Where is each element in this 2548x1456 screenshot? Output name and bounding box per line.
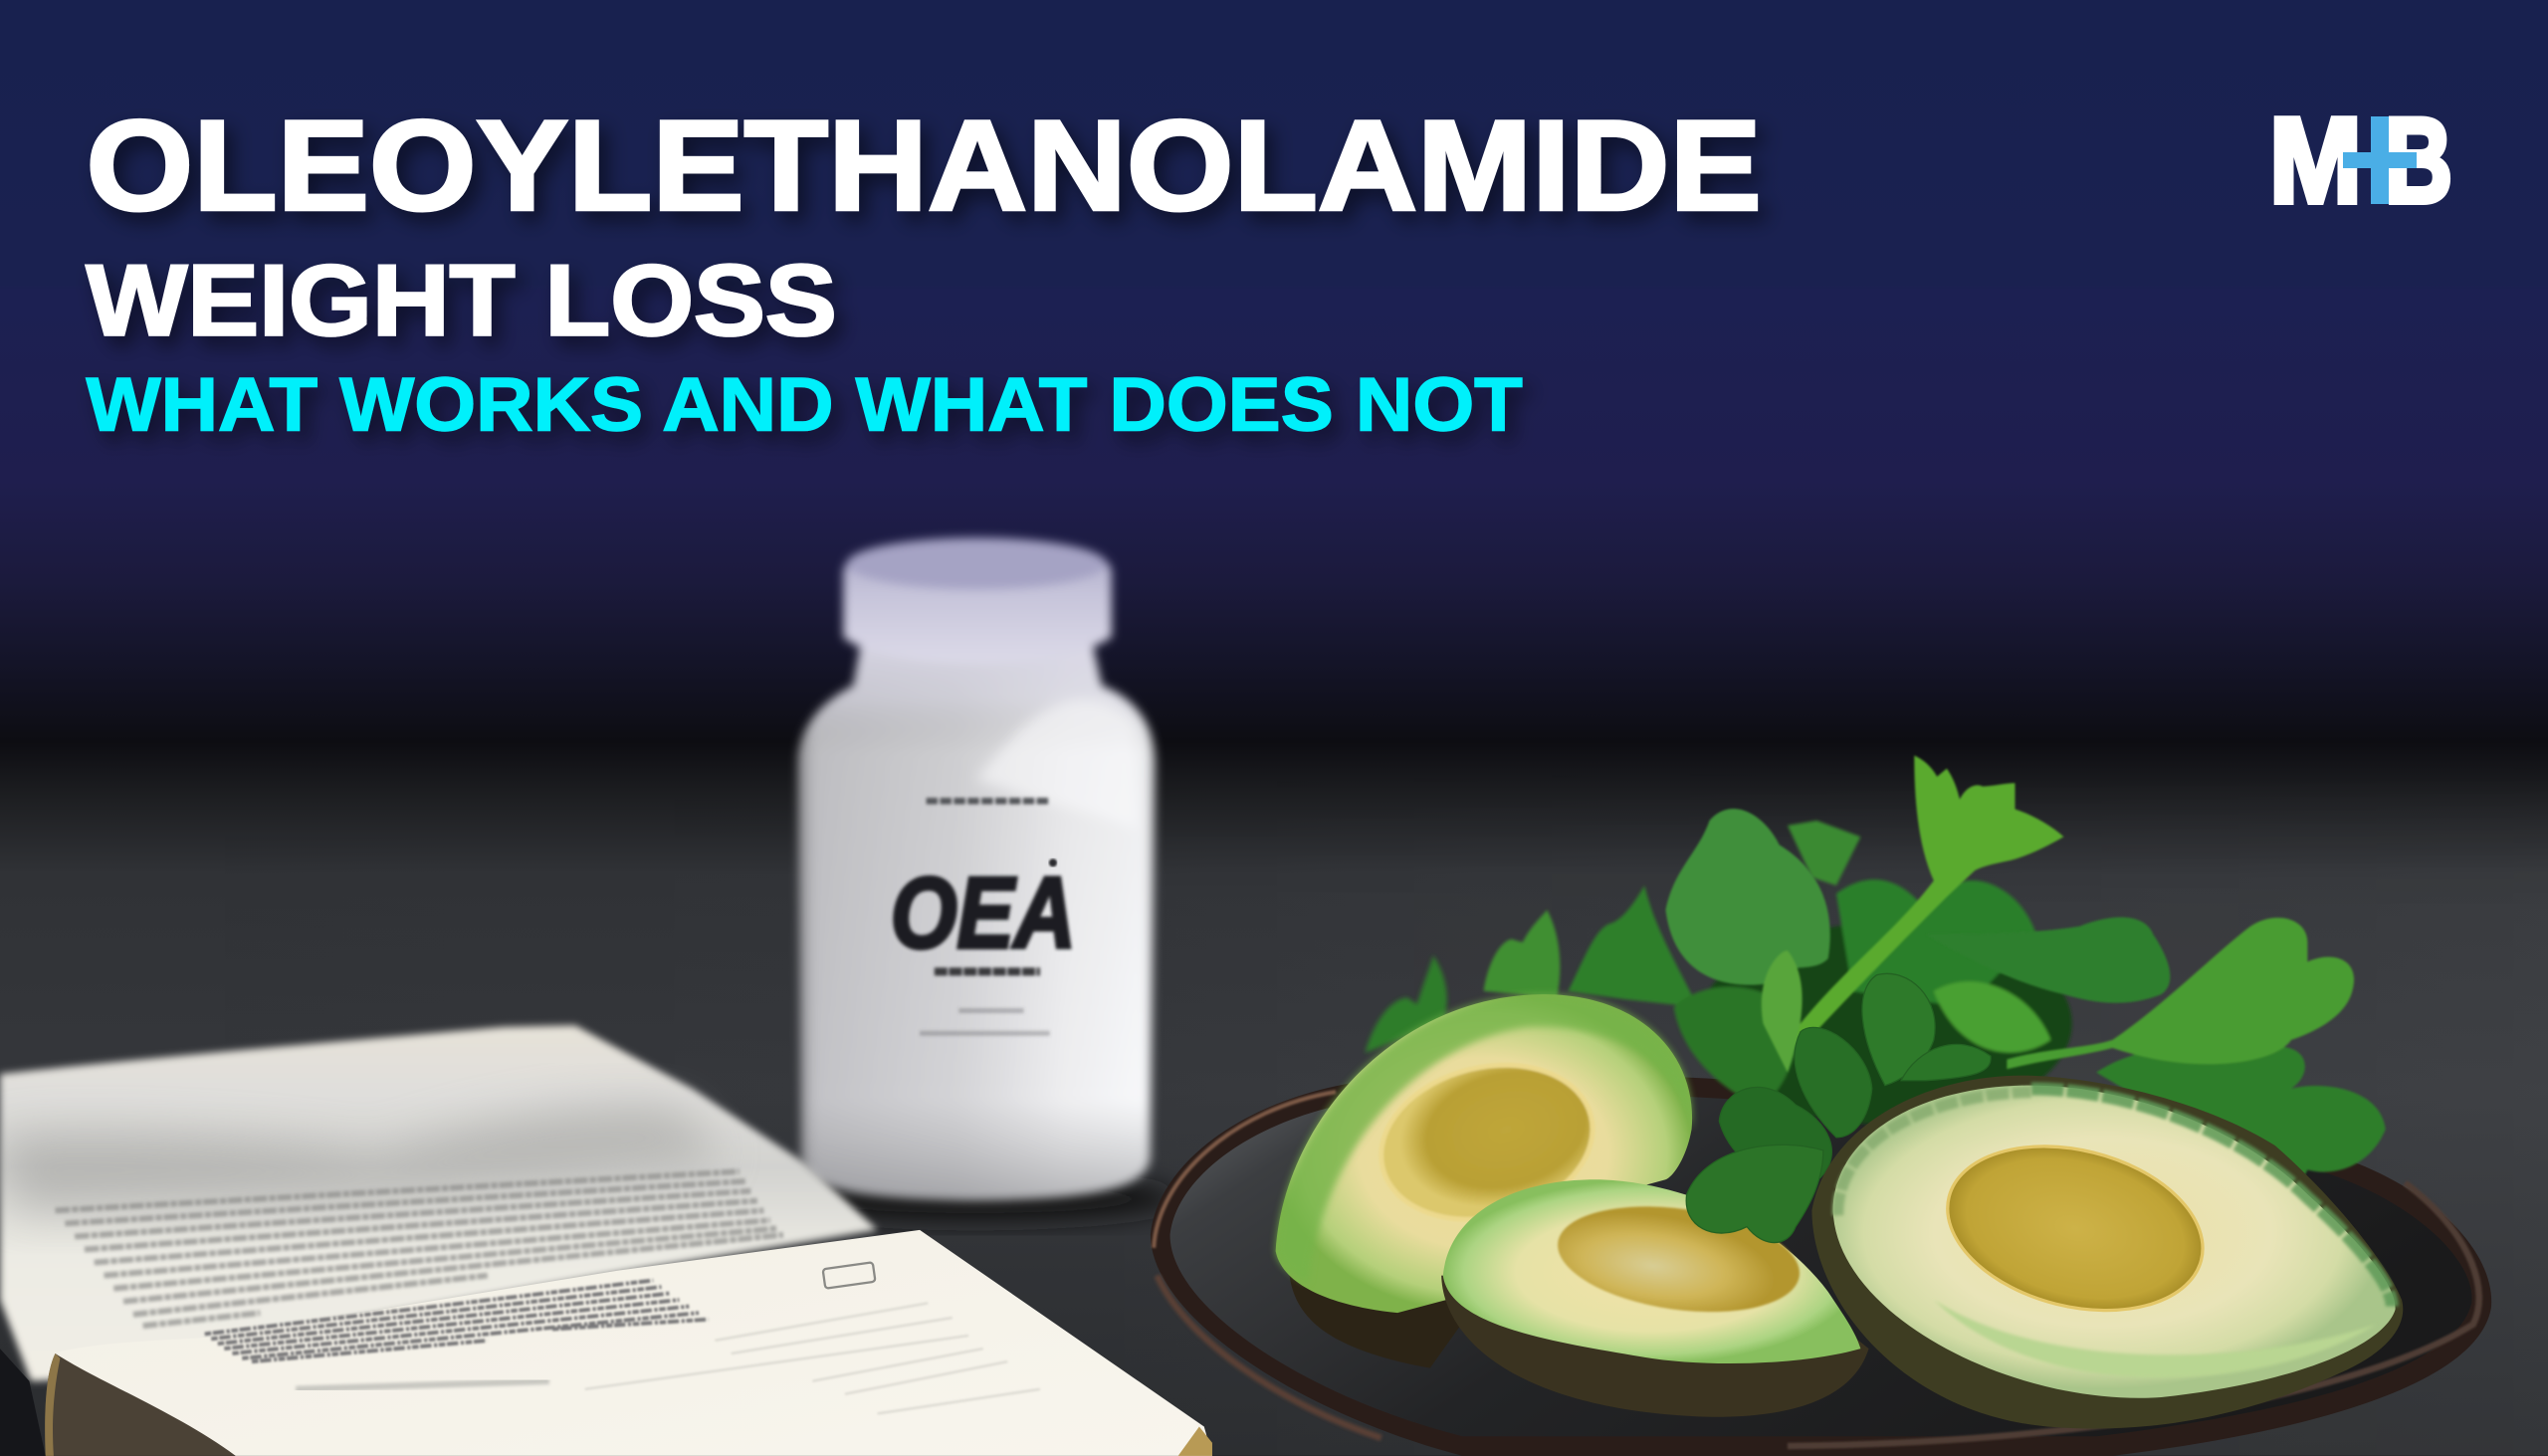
pit small	[1551, 1192, 1806, 1326]
lower right leaves	[2096, 1044, 2386, 1194]
logo: M+B	[2269, 93, 2452, 228]
book lower page	[0, 1230, 1212, 1456]
pit left	[1365, 1044, 1609, 1241]
right leaf	[1926, 918, 2170, 1003]
book upper page	[0, 1025, 878, 1381]
logo: M+B: B	[2385, 93, 2452, 228]
avocado right large	[1811, 1076, 2403, 1429]
background leaves	[1365, 820, 2072, 1125]
bottle label text	[891, 801, 1076, 1033]
top leaf	[1788, 755, 2063, 1048]
open book	[0, 1025, 1212, 1456]
avocado front small	[1441, 1179, 1869, 1417]
avocado back left	[1276, 994, 1692, 1368]
foreground leaves	[1665, 755, 2386, 1194]
clover leaf	[1686, 973, 1991, 1243]
logo: M+B: M	[2269, 93, 2362, 228]
bottle with OEA label	[772, 537, 1178, 1222]
table surface side light	[2239, 893, 2548, 1455]
plate	[1151, 1073, 2491, 1456]
tagline: WHAT WORKS AND WHAT DOES NOT	[87, 363, 1523, 448]
big left leaf	[1665, 809, 1830, 985]
far right leaf	[2007, 918, 2354, 1069]
bottle label text: OEA	[891, 857, 1076, 969]
subtitle: WEIGHT LOSS	[87, 244, 837, 356]
title: OLEOYLETHANOLAMIDE	[87, 95, 1762, 238]
pit large	[1930, 1122, 2221, 1336]
